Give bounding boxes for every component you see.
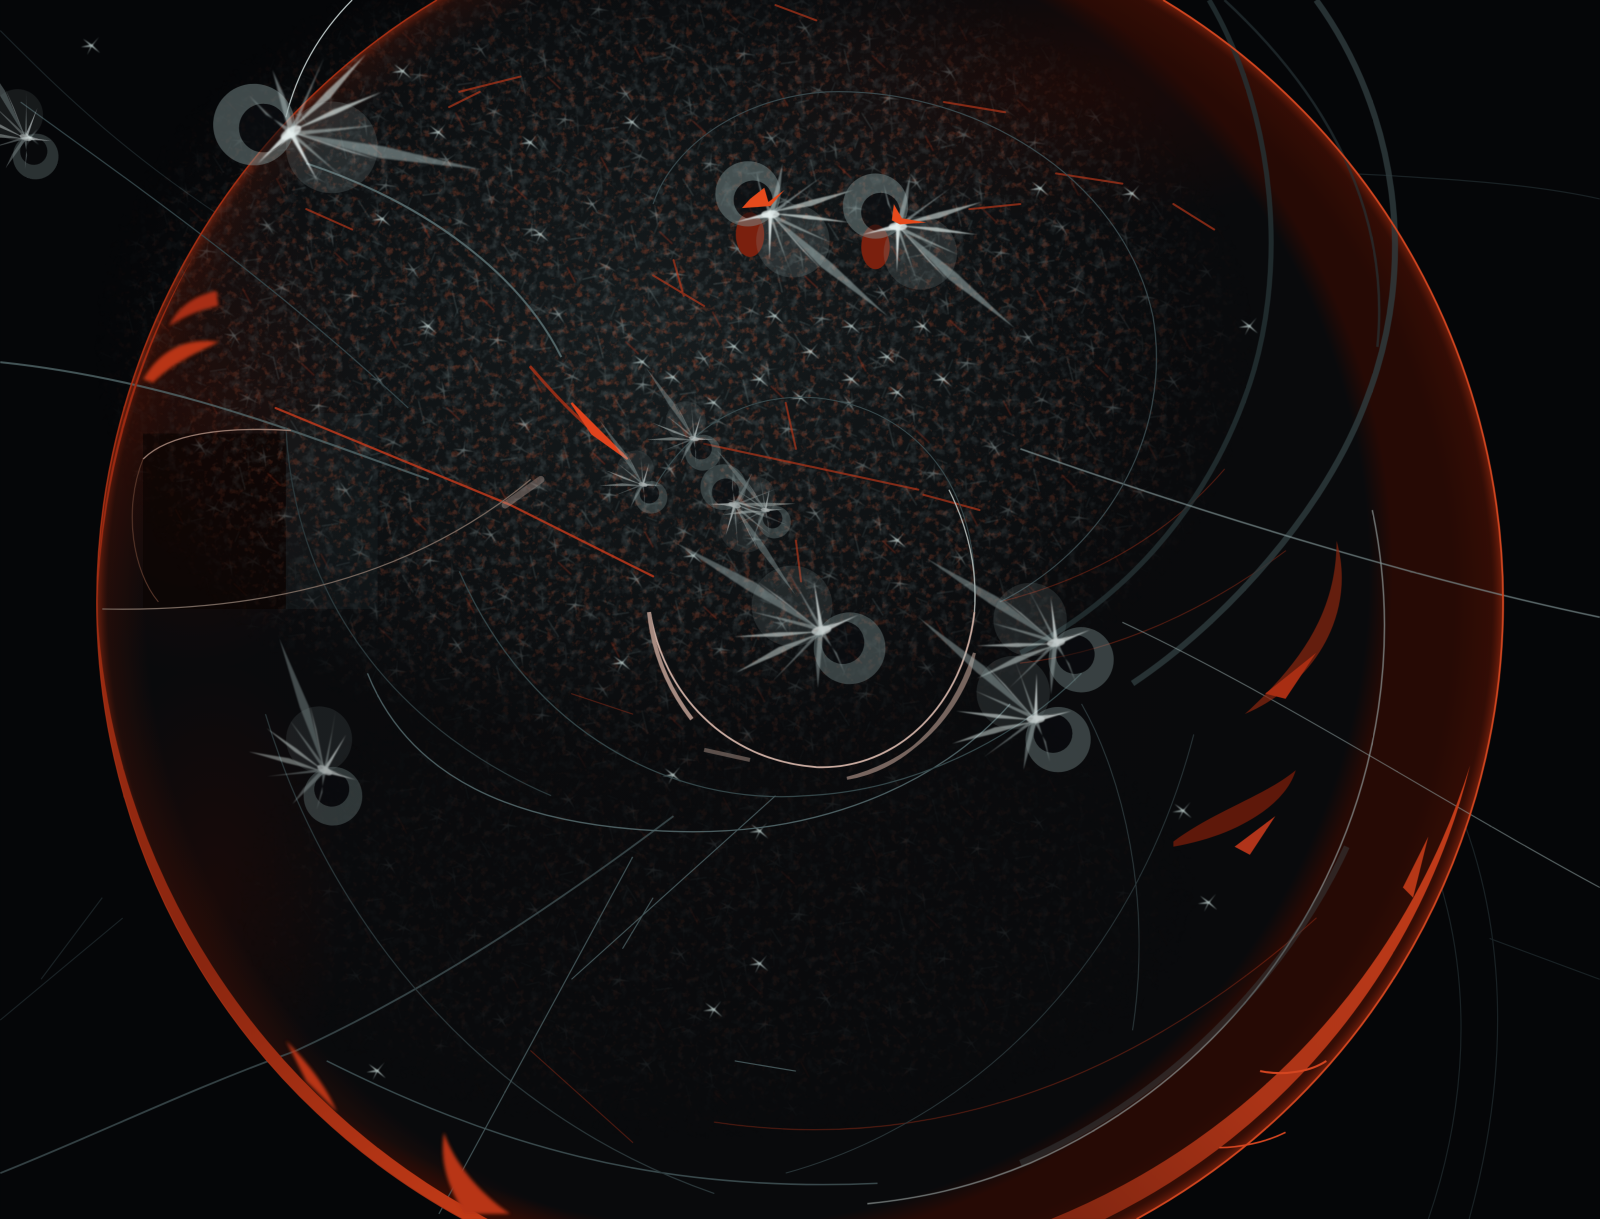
dark red base bbox=[357, 0, 1502, 1219]
burst: far left bbox=[0, 43, 86, 186]
burst: centre lower bbox=[675, 509, 891, 710]
burst: right lower bbox=[918, 617, 1091, 772]
burst: upper centre left bbox=[715, 161, 888, 316]
panel: hard-edged left block bbox=[143, 413, 378, 609]
orange rim: thin outline right bbox=[1137, 0, 1503, 1219]
burst: upper left bbox=[198, 2, 482, 277]
red wash upper left bbox=[120, 259, 292, 562]
orange rim: right crescent bbox=[1051, 765, 1470, 1219]
burst: right upper bbox=[926, 534, 1118, 712]
central peach crescent bbox=[649, 490, 975, 778]
burst: left lower bbox=[209, 638, 413, 836]
orange rim: right mid glow bbox=[1245, 541, 1342, 714]
red wash lower left bbox=[170, 786, 278, 982]
mottled texture bbox=[126, 0, 1220, 1074]
burst: upper centre right bbox=[843, 173, 1015, 328]
dense central flakes bbox=[20, 37, 1258, 1080]
burst: middle cluster bbox=[579, 368, 824, 595]
orange rim: upper-left band bbox=[97, 255, 194, 609]
orange rim: lower-right inner flares bbox=[1173, 653, 1428, 1148]
orange rim: thin outline left bbox=[97, 0, 463, 1219]
main red streak bbox=[276, 367, 653, 576]
panel: upper teal haze bbox=[123, 0, 1184, 745]
red wash top right bbox=[890, 16, 1207, 166]
orange rim: left highlights bbox=[143, 291, 510, 1214]
orange rim: lower-left band bbox=[97, 609, 488, 1219]
red scratches bbox=[306, 5, 1316, 1142]
flake texture bbox=[148, 0, 1222, 1090]
